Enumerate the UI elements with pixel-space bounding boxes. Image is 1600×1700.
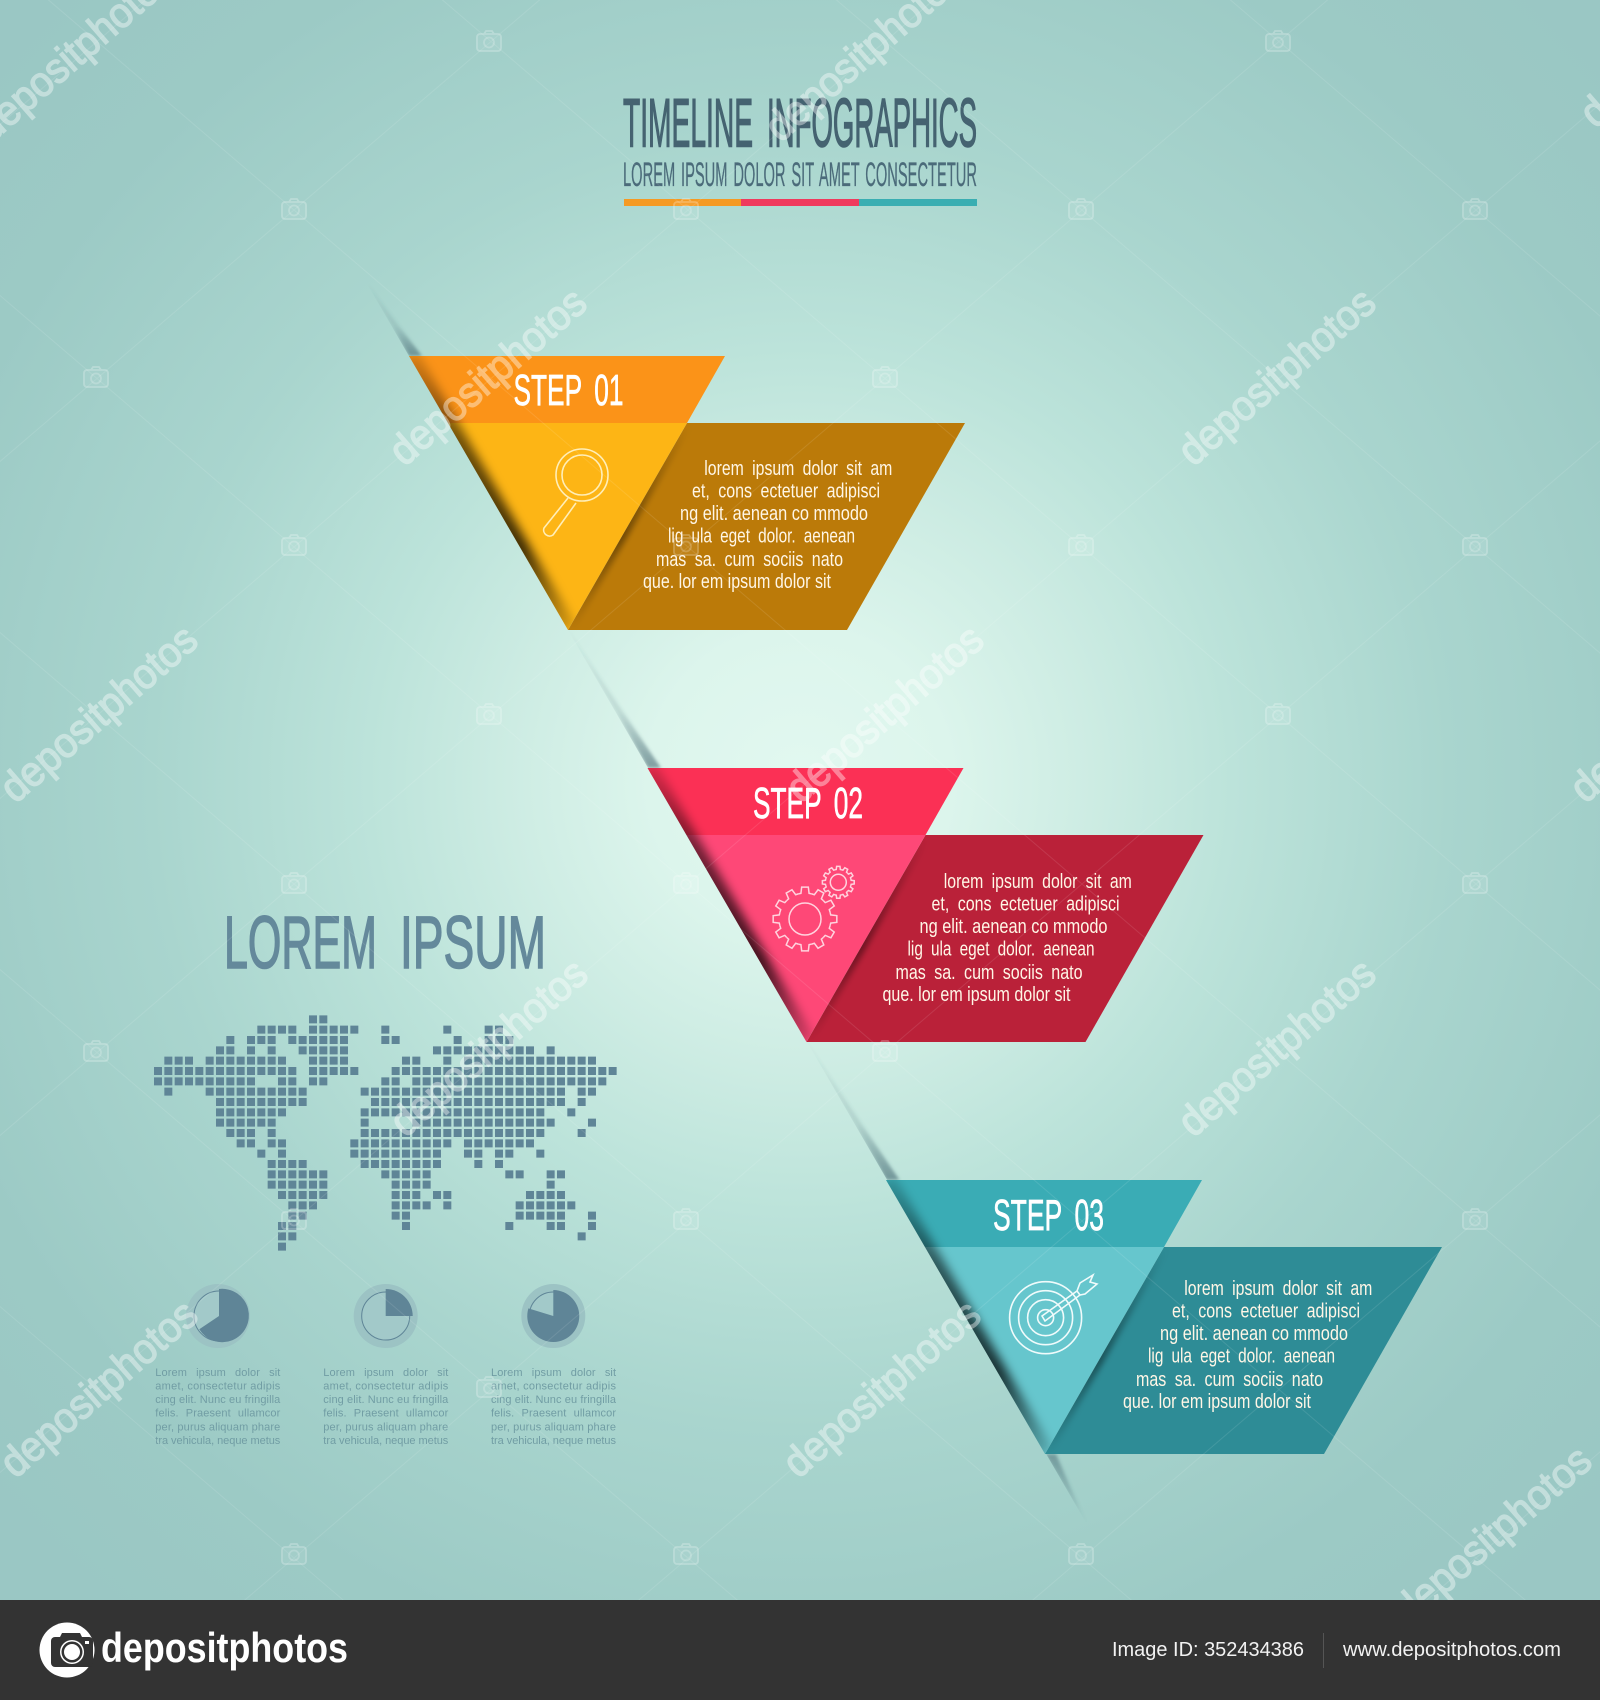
- text column 1: cing elit. Nunc eu fringilla: [155, 1394, 281, 1406]
- dotted world map: [154, 1019, 619, 1247]
- watermark text: depositphotos: [380, 949, 596, 1145]
- text panel edge shadow: [574, 437, 680, 619]
- watermark text: depositphotos: [776, 615, 992, 811]
- text panel edge shadow: [814, 849, 918, 1031]
- footer bar: [0, 1600, 1600, 1700]
- step label: STEP 02: [753, 779, 863, 828]
- icon: magnifier: [544, 449, 608, 536]
- text column 1: Lorem ipsum dolor sit: [155, 1367, 280, 1379]
- watermark text: depositphotos: [1168, 949, 1384, 1145]
- body text: que. lor em ipsum dolor sit: [643, 571, 831, 593]
- body text: mas sa. cum sociis nato: [896, 962, 1082, 984]
- text column 3: amet, consectetur adipis: [491, 1380, 616, 1392]
- text panel edge shadow: [1054, 1264, 1155, 1440]
- body text: et, cons ectetuer adipisci: [692, 481, 880, 503]
- body text: et, cons ectetuer adipisci: [932, 894, 1120, 916]
- body text: lorem ipsum dolor sit am: [704, 458, 892, 480]
- body text: mas sa. cum sociis nato: [656, 549, 843, 571]
- text: INFOGRAPHICS: [767, 84, 977, 162]
- icon: target with arrow: [1010, 1275, 1097, 1354]
- logo wordmark: depositphotos: [101, 1624, 348, 1671]
- triangle edge shadow: [409, 356, 568, 630]
- text column 1: felis. Praesent ullamcor: [155, 1408, 281, 1420]
- text column 1: amet, consectetur adipis: [155, 1380, 281, 1392]
- step label: STEP 03: [993, 1191, 1104, 1240]
- body text: lorem ipsum dolor sit am: [1184, 1278, 1372, 1300]
- body text: [1123, 1278, 1372, 1413]
- body text: ng elit. aenean co mmodo: [1160, 1323, 1348, 1345]
- text: LOREM IPSUM DOLOR SIT AMET CONSECTETUR: [623, 156, 977, 194]
- text column 2: Lorem ipsum dolor sit: [323, 1367, 448, 1379]
- text column 2: [323, 1367, 449, 1447]
- icon: gears: [773, 866, 854, 951]
- text column 1: [155, 1367, 281, 1447]
- tricolour rule: [624, 199, 977, 206]
- website: www.depositphotos.com: [1342, 1639, 1561, 1661]
- header band: [886, 1180, 1202, 1247]
- title: [623, 84, 977, 206]
- body text: que. lor em ipsum dolor sit: [882, 984, 1071, 1006]
- title: TIMELINE: [623, 84, 753, 162]
- text panel: [1045, 1247, 1442, 1454]
- lower triangle: [686, 835, 926, 1042]
- header band: [648, 768, 964, 835]
- text column 2: felis. Praesent ullamcor: [323, 1408, 449, 1420]
- body text: que. lor em ipsum dolor sit: [1123, 1391, 1311, 1413]
- body text: lig ula eget dolor. aenean: [668, 526, 855, 548]
- image id: Image ID: 352434386: [1112, 1639, 1304, 1661]
- body text: [882, 871, 1132, 1006]
- text column 3: cing elit. Nunc eu fringilla: [491, 1394, 617, 1406]
- text panel: [806, 835, 1204, 1042]
- text column 3: [491, 1367, 617, 1447]
- body text: lig ula eget dolor. aenean: [908, 939, 1094, 961]
- text column 3: Lorem ipsum dolor sit: [491, 1367, 616, 1379]
- watermark camera icons: [84, 31, 1487, 1564]
- body text: [643, 458, 892, 593]
- lower triangle: [925, 1247, 1164, 1454]
- text column 1: per, purus aliquam phare: [155, 1422, 280, 1434]
- body text: ng elit. aenean co mmodo: [680, 503, 868, 525]
- body text: lig ula eget dolor. aenean: [1148, 1346, 1335, 1368]
- text panel: [568, 423, 965, 630]
- step label: STEP 01: [514, 366, 624, 415]
- pie chart 2: [354, 1284, 418, 1348]
- text column 3: per, purus aliquam phare: [491, 1422, 616, 1434]
- panel: step 02: [648, 768, 1204, 1042]
- text column 2: tra vehicula, neque metus: [323, 1435, 449, 1447]
- heading: lorem ipsum: IPSUM: [400, 901, 546, 984]
- text column 3: felis. Praesent ullamcor: [491, 1408, 616, 1420]
- pie chart 1: [186, 1284, 250, 1348]
- panel: step 01: [409, 356, 965, 630]
- watermark text: depositphotos: [773, 1290, 989, 1486]
- text column 2: per, purus aliquam phare: [323, 1422, 448, 1434]
- pie chart 3: [521, 1284, 585, 1348]
- text column 1: tra vehicula, neque metus: [155, 1435, 281, 1447]
- diagonal fold shadows: [367, 284, 1087, 1525]
- watermark text: depositphotos: [379, 278, 595, 474]
- body text: ng elit. aenean co mmodo: [920, 916, 1108, 938]
- body text: lorem ipsum dolor sit am: [944, 871, 1132, 893]
- header band: [409, 356, 725, 423]
- triangle edge shadow: [648, 768, 806, 1042]
- watermark text: depositphotos: [1168, 278, 1384, 474]
- text column 2: amet, consectetur adipis: [323, 1380, 449, 1392]
- lower triangle: [448, 423, 687, 630]
- heading: lorem ipsum: LOREM: [224, 901, 377, 984]
- divider: [1323, 1633, 1324, 1668]
- body text: et, cons ectetuer adipisci: [1172, 1301, 1360, 1323]
- text column 2: cing elit. Nunc eu fringilla: [323, 1394, 449, 1406]
- body text: mas sa. cum sociis nato: [1136, 1369, 1323, 1391]
- triangle edge shadow: [886, 1180, 1045, 1454]
- text column 3: tra vehicula, neque metus: [491, 1435, 616, 1447]
- panel: step 03: [886, 1180, 1442, 1454]
- icon: depositphotos logo: [40, 1622, 94, 1678]
